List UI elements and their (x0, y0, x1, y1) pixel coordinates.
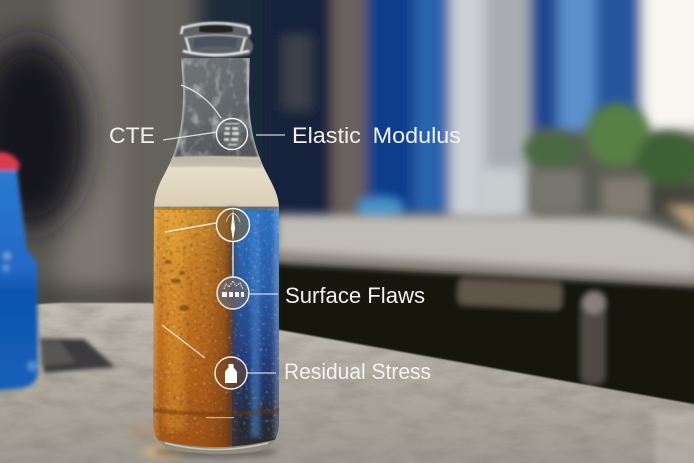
label: Residual Stress: Residual Stress (284, 359, 431, 384)
icon: residual stress bottle circle (215, 357, 247, 389)
connector lines (162, 85, 285, 373)
blurred blue bottle at left (0, 152, 38, 391)
foam (150, 156, 282, 207)
icon: surface flaws circle (217, 277, 249, 309)
label: CTE: CTE (109, 123, 155, 148)
amber liquid (150, 207, 234, 447)
droplets (150, 207, 282, 439)
bottle shadow (154, 446, 278, 458)
base band (150, 408, 282, 416)
marble countertop (0, 300, 694, 463)
main bottle (148, 22, 283, 460)
glass edge highlights (173, 60, 184, 158)
icon: CTE / elastic modulus circle (216, 118, 248, 150)
dark mat on counter (40, 339, 115, 373)
bottle lip and collar (179, 22, 253, 58)
blue liquid (232, 207, 282, 447)
bottle glass and contents (148, 55, 283, 460)
icon: crack spike circle (216, 208, 250, 242)
label: Surface Flaws: Surface Flaws (285, 283, 425, 308)
label: Elastic Modulus: Elastic Modulus (292, 123, 461, 148)
